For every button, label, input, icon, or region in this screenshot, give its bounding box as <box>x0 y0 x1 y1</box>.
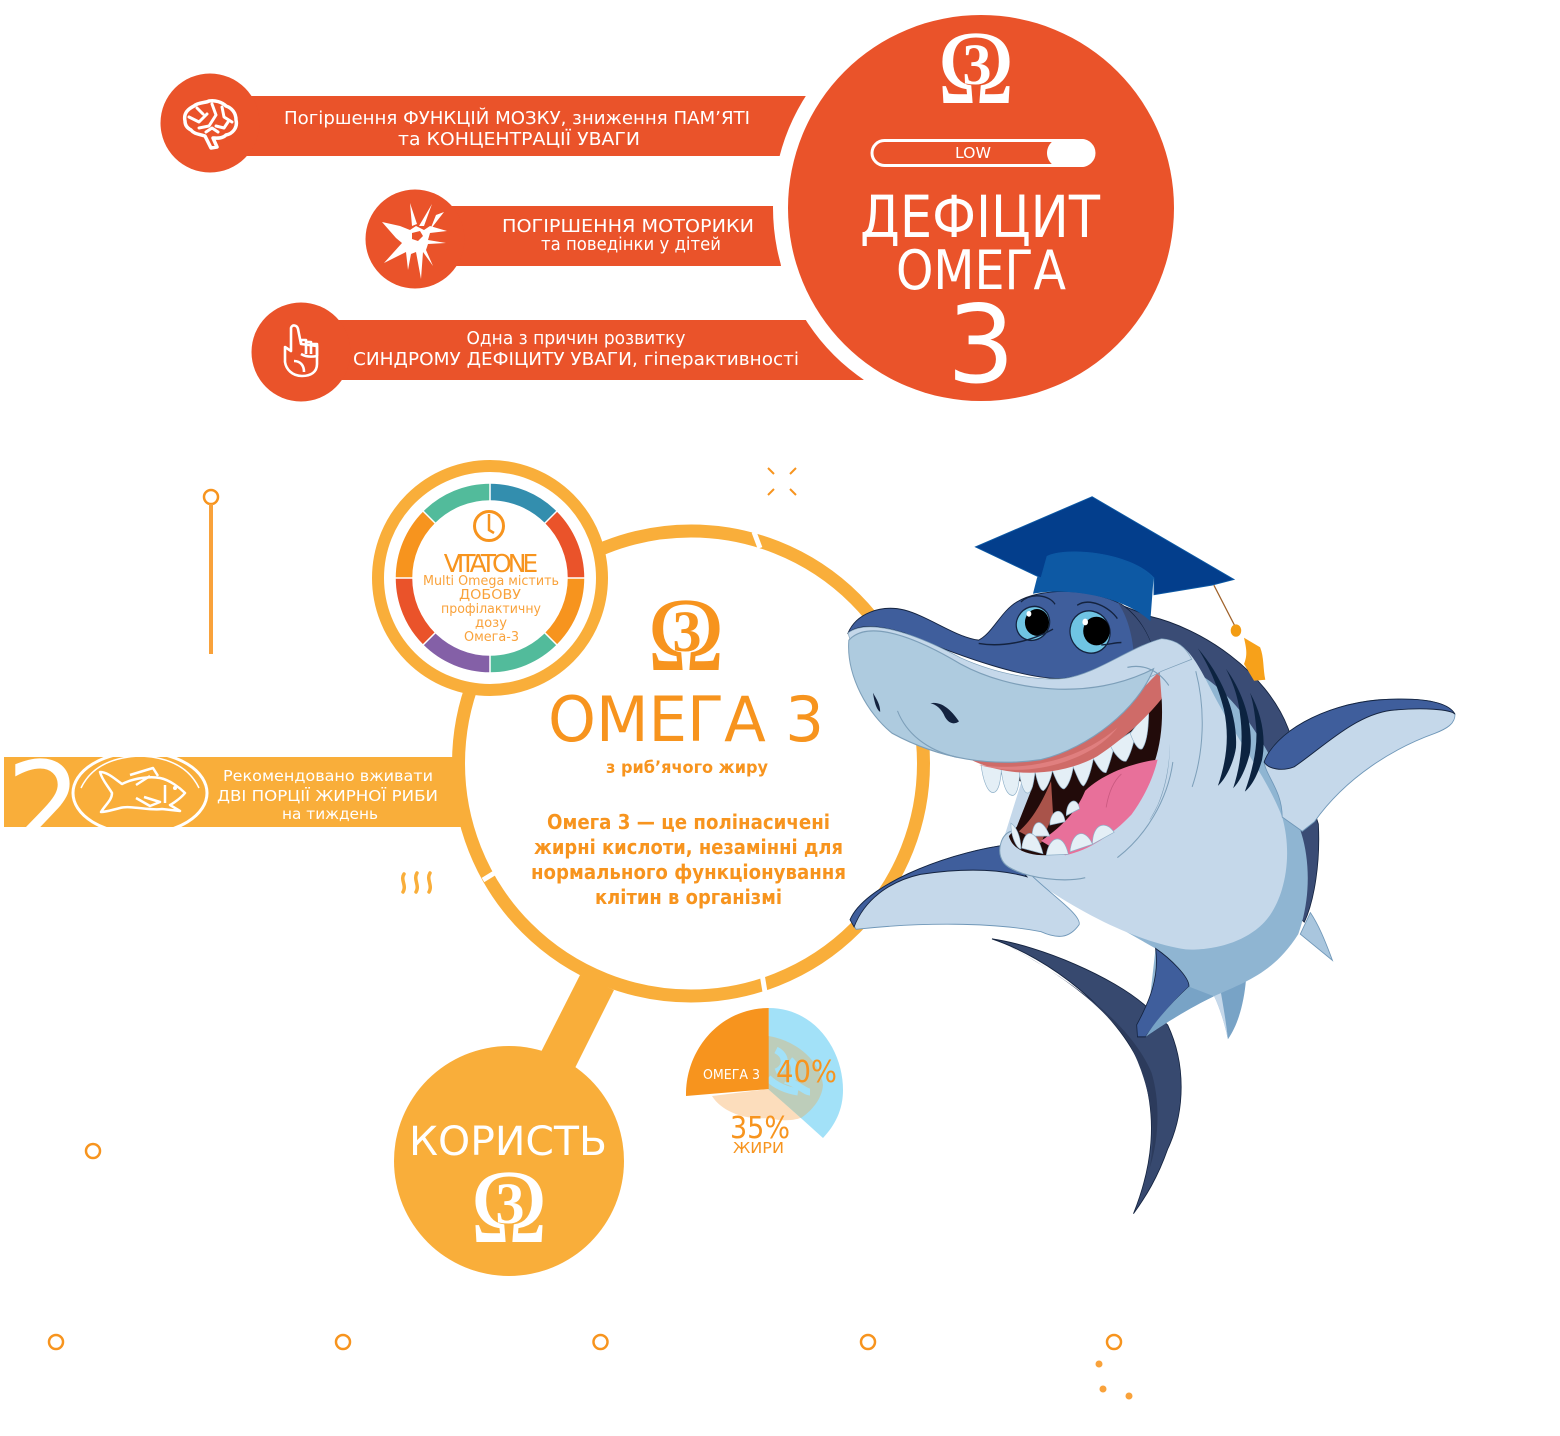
gills <box>1198 648 1264 792</box>
brand: VITATONE <box>444 549 537 578</box>
description text: нормального функціонування <box>531 860 846 884</box>
body <box>1001 639 1287 950</box>
left pectoral fin <box>850 846 1079 936</box>
mouth interior <box>981 697 1162 855</box>
cap <box>975 497 1265 681</box>
banner: motor skills <box>366 190 781 288</box>
icon: omega 3: 3 <box>496 1171 524 1236</box>
dose text <box>423 573 559 645</box>
banner: brain function: Погіршення ФУНКЦІЙ МОЗКУ, зниження ПАМ’ЯТІ <box>284 107 750 129</box>
lower teeth <box>1011 801 1114 855</box>
mouth corner line <box>1127 666 1169 686</box>
eyes <box>979 596 1121 657</box>
icon: brain <box>185 101 236 148</box>
description text: жирні кислоти, незамінні для <box>534 835 843 859</box>
banner: two portions of fish: на тиждень <box>282 805 378 823</box>
icon: fish <box>100 768 185 812</box>
banner: attention deficit: СИНДРОМУ ДЕФІЦИТУ УВАГИ, гіперактивності <box>353 350 799 370</box>
pie chart: brain composition: ЖИРИ <box>733 1139 784 1157</box>
decorative marks <box>49 468 1132 1400</box>
description text <box>531 810 846 909</box>
dose text: Омега-3 <box>464 629 519 645</box>
banner: two portions of fish: 2 <box>6 736 82 878</box>
heading: benefits: КОРИСТЬ <box>409 1119 607 1165</box>
banner: attention deficit: Одна з причин розвитку <box>466 329 686 349</box>
tongue <box>1041 760 1158 855</box>
dose text: ДОБОВУ <box>459 587 521 603</box>
banner: brain function: та КОНЦЕНТРАЦІЇ УВАГИ <box>398 129 640 150</box>
toggle: low level: LOW <box>955 144 991 162</box>
panel: Omega 3 ring <box>458 531 924 996</box>
banner: motor skills: та поведінки у дітей <box>541 235 721 255</box>
illustration: shark with graduation cap <box>848 497 1455 1214</box>
brain shadow <box>712 1089 803 1120</box>
bottom blue fin <box>1137 948 1214 1037</box>
icon: omega 3: Ω <box>470 1148 548 1265</box>
white halo around main circle <box>773 0 1189 416</box>
heading: omega: ОМЕГА <box>896 239 1066 302</box>
body shade <box>1029 671 1308 1037</box>
upper teeth <box>981 709 1149 795</box>
tassel <box>1214 585 1236 628</box>
snout band <box>848 627 1192 697</box>
head top <box>848 591 1152 679</box>
pie chart: brain composition: 35% <box>730 1111 790 1146</box>
panel: Omega 3 deficiency <box>160 0 1189 416</box>
dose text: дозу <box>475 615 507 631</box>
banner: attention deficit <box>252 302 864 402</box>
snout <box>849 631 1154 762</box>
heading: deficiency: ДЕФІЦИТ <box>860 183 1100 251</box>
panel: benefits circle <box>394 1046 624 1276</box>
icon: clock <box>474 512 504 540</box>
dark back <box>1121 605 1319 922</box>
donut segments <box>394 482 586 674</box>
description text: клітин в організмі <box>595 885 782 909</box>
cap band <box>1033 552 1154 621</box>
toggle: low level <box>872 139 1095 167</box>
connector to benefits circle <box>541 975 614 1068</box>
banner: brain function <box>160 74 806 172</box>
head shadow <box>1117 602 1152 650</box>
heading: omega 3: ОМЕГА 3 <box>548 683 824 756</box>
banner: two portions of fish: ДВІ ПОРЦІЇ ЖИРНОЇ РИБИ <box>217 786 438 805</box>
heading: number 3: 3 <box>947 283 1015 408</box>
description text: Омега 3 — це полінасичені <box>547 810 830 834</box>
body contour lines <box>1150 671 1202 819</box>
pie chart: brain composition: ОМЕГА 3 <box>703 1068 760 1083</box>
throat <box>1019 781 1053 843</box>
icon: omega 3: 3 <box>672 599 702 664</box>
tail <box>992 939 1181 1214</box>
lower jaw <box>1000 671 1170 880</box>
icon: omega 3: Ω <box>647 576 725 693</box>
icon: pointing hand <box>285 325 317 376</box>
lower fins <box>1208 913 1332 1039</box>
banner: two portions of fish: Рекомендовано вживати <box>223 767 433 785</box>
brain on blue slice <box>768 1036 823 1118</box>
banner: motor skills: ПОГІРШЕННЯ МОТОРИКИ <box>502 217 754 237</box>
gum <box>971 671 1162 773</box>
dose text: Multi Omega містить <box>423 573 559 589</box>
icon: omega 3: Ω <box>937 9 1015 126</box>
slice: omega 3 <box>686 1008 769 1096</box>
dose text: профілактичну <box>441 601 541 617</box>
pie chart: brain composition <box>686 1008 843 1157</box>
cap board <box>975 497 1234 595</box>
subheading: з риб’ячого жиру <box>606 758 768 778</box>
nostrils and snout lines <box>873 693 959 757</box>
right pectoral fin <box>1264 699 1455 831</box>
slice: fats <box>769 1008 843 1138</box>
panel: Vitatone daily dose <box>378 466 602 690</box>
banner: two portions of fish <box>4 757 461 827</box>
icon: crack <box>382 203 447 279</box>
main circle <box>788 15 1174 401</box>
icon: omega 3: 3 <box>962 32 992 97</box>
pie chart: brain composition: 40% <box>776 1055 837 1090</box>
